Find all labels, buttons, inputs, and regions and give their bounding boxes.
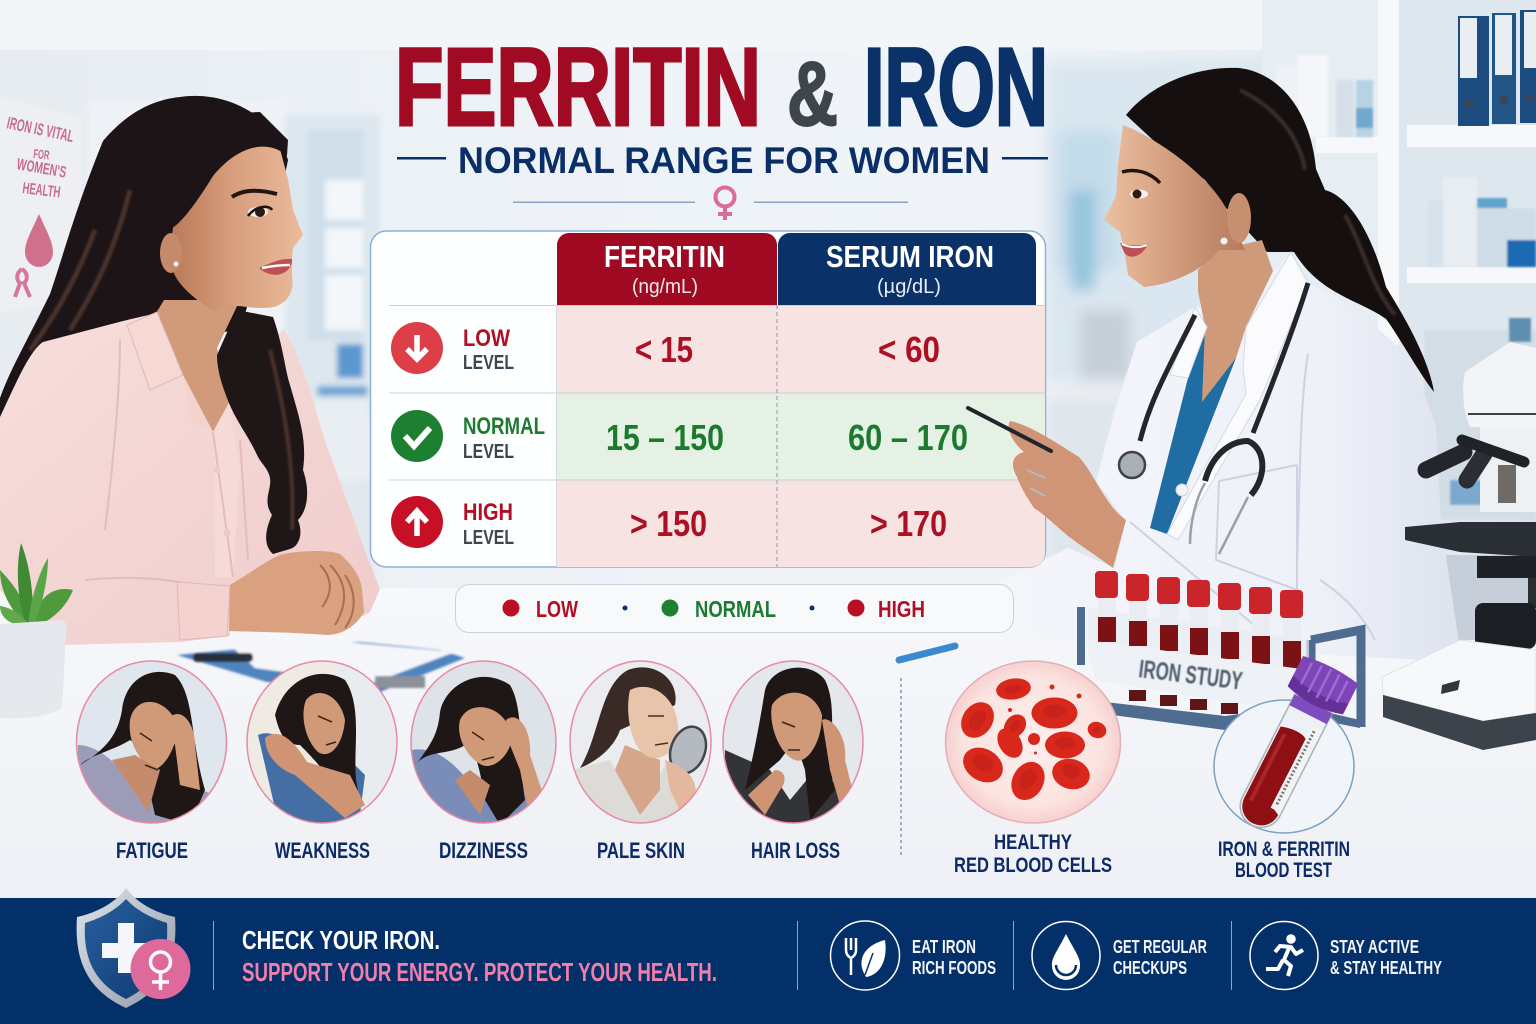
legend pill: HIGH [878, 596, 925, 622]
row: high level: LEVEL [463, 527, 514, 549]
tubes [1095, 571, 1303, 673]
symptom: pale skin: PALE SKIN [597, 838, 685, 863]
tip: get regular checkups: CHECKUPS [1113, 958, 1187, 978]
desk surface [0, 588, 1536, 898]
cuff [177, 582, 230, 640]
row backgrounds [557, 306, 1045, 393]
symptom: dizziness: DIZZINESS [439, 838, 528, 863]
poster on wall: IRON IS VITAL [5, 113, 76, 146]
table [370, 231, 1046, 567]
symptom: pale skin [565, 655, 715, 863]
healthy red blood cells: RED BLOOD CELLS [954, 854, 1112, 877]
hair and ponytail [1126, 68, 1434, 392]
legend pill [456, 584, 1014, 632]
title: & [787, 44, 838, 145]
tip: get regular checkups: GET REGULAR [1113, 937, 1207, 957]
column header: ferritin: FERRITIN [604, 239, 725, 274]
woman patient [0, 96, 380, 645]
label plate [1085, 640, 1309, 710]
symptom: dizziness [410, 660, 557, 858]
female symbol divider [513, 188, 908, 220]
row: low level: < 60 [878, 329, 940, 370]
coat details [1130, 354, 1375, 640]
column header: ferritin [557, 233, 777, 305]
tip: eat iron rich foods [830, 921, 996, 990]
tube rack: iron study: IRON STUDY [1137, 655, 1244, 696]
hands [229, 551, 364, 635]
row: low level: LOW [463, 325, 510, 352]
row: high level: HIGH [463, 499, 513, 526]
tip: get regular checkups [1032, 922, 1207, 990]
row: high level: > 170 [870, 503, 947, 544]
iron and ferritin blood test: BLOOD TEST [1235, 859, 1332, 882]
right hair over blouse [217, 310, 307, 554]
microscope [1382, 342, 1536, 750]
face [1104, 125, 1245, 287]
icon: shield with cross and female symbol [77, 888, 190, 1008]
row: low level [391, 322, 940, 374]
poster on wall: HEALTH [22, 180, 61, 202]
tagline: CHECK YOUR IRON. [242, 925, 440, 955]
symptom: weakness: WEAKNESS [275, 838, 370, 863]
face [171, 140, 303, 310]
neck [157, 300, 240, 432]
scrubs [1150, 327, 1236, 534]
doctor's hand and pen over table [968, 408, 1126, 568]
tagline: SUPPORT YOUR ENERGY. PROTECT YOUR HEALTH. [242, 957, 717, 987]
blouse [0, 313, 380, 645]
row: normal level: LEVEL [463, 441, 514, 463]
row: high level [391, 496, 947, 549]
symptom: fatigue: FATIGUE [116, 838, 188, 863]
blue pen [899, 646, 955, 660]
bottom banner [0, 888, 1536, 1024]
column header: serum iron: (µg/dL) [877, 276, 941, 298]
coat [985, 252, 1462, 662]
legend pill: NORMAL [695, 596, 776, 622]
row: normal level [391, 410, 968, 463]
symptom: weakness [246, 660, 398, 858]
tip: stay active and stay healthy: STAY ACTIVE [1330, 937, 1419, 957]
row: normal level: 15 – 150 [606, 417, 724, 458]
row: normal level: NORMAL [463, 413, 545, 440]
wall behind microscope [1440, 555, 1536, 640]
title: IRON [864, 26, 1048, 149]
poster on wall [0, 97, 82, 312]
neck [1198, 240, 1273, 402]
tip: eat iron rich foods: EAT IRON [912, 937, 976, 957]
tip: stay active and stay healthy [1250, 922, 1442, 990]
doctor [985, 68, 1462, 662]
tube rack: iron study [1081, 571, 1361, 730]
stethoscope [1140, 283, 1308, 554]
hairline [155, 112, 288, 310]
lapels [1167, 252, 1308, 540]
blouse details [85, 340, 248, 582]
shelves right [1262, 0, 1536, 520]
row: low level: LEVEL [463, 352, 514, 374]
healthy red blood cells: HEALTHY [994, 831, 1072, 854]
subtitle: normal range for women: NORMAL RANGE FOR WOMEN [458, 140, 990, 181]
tip: eat iron rich foods: RICH FOODS [912, 958, 996, 978]
title: FERRITIN [395, 26, 761, 149]
tip: stay active and stay healthy: & STAY HEALTHY [1330, 958, 1442, 978]
hair back [0, 96, 288, 430]
tagline [242, 925, 717, 987]
column header: ferritin: (ng/mL) [632, 276, 698, 298]
iron and ferritin blood test: IRON & FERRITIN [1218, 838, 1350, 861]
poster on wall: FOR [33, 146, 51, 163]
symptom: fatigue [76, 660, 228, 858]
column header: serum iron [778, 233, 1036, 305]
symptom: hair loss: HAIR LOSS [751, 838, 840, 863]
row: normal level: 60 – 170 [848, 417, 968, 458]
legend pill: LOW [536, 596, 578, 622]
healthy red blood cells [946, 661, 1120, 877]
row: low level: < 15 [635, 329, 693, 370]
clipboard and pens on desk [177, 642, 465, 694]
plant and pot [0, 543, 73, 719]
column header: serum iron: SERUM IRON [826, 239, 994, 274]
poster on wall: WOMEN'S [15, 156, 68, 182]
iron and ferritin blood test [1214, 653, 1360, 882]
symptom: hair loss [720, 655, 870, 863]
row: high level: > 150 [630, 503, 707, 544]
features [232, 191, 277, 197]
collar [127, 312, 183, 390]
